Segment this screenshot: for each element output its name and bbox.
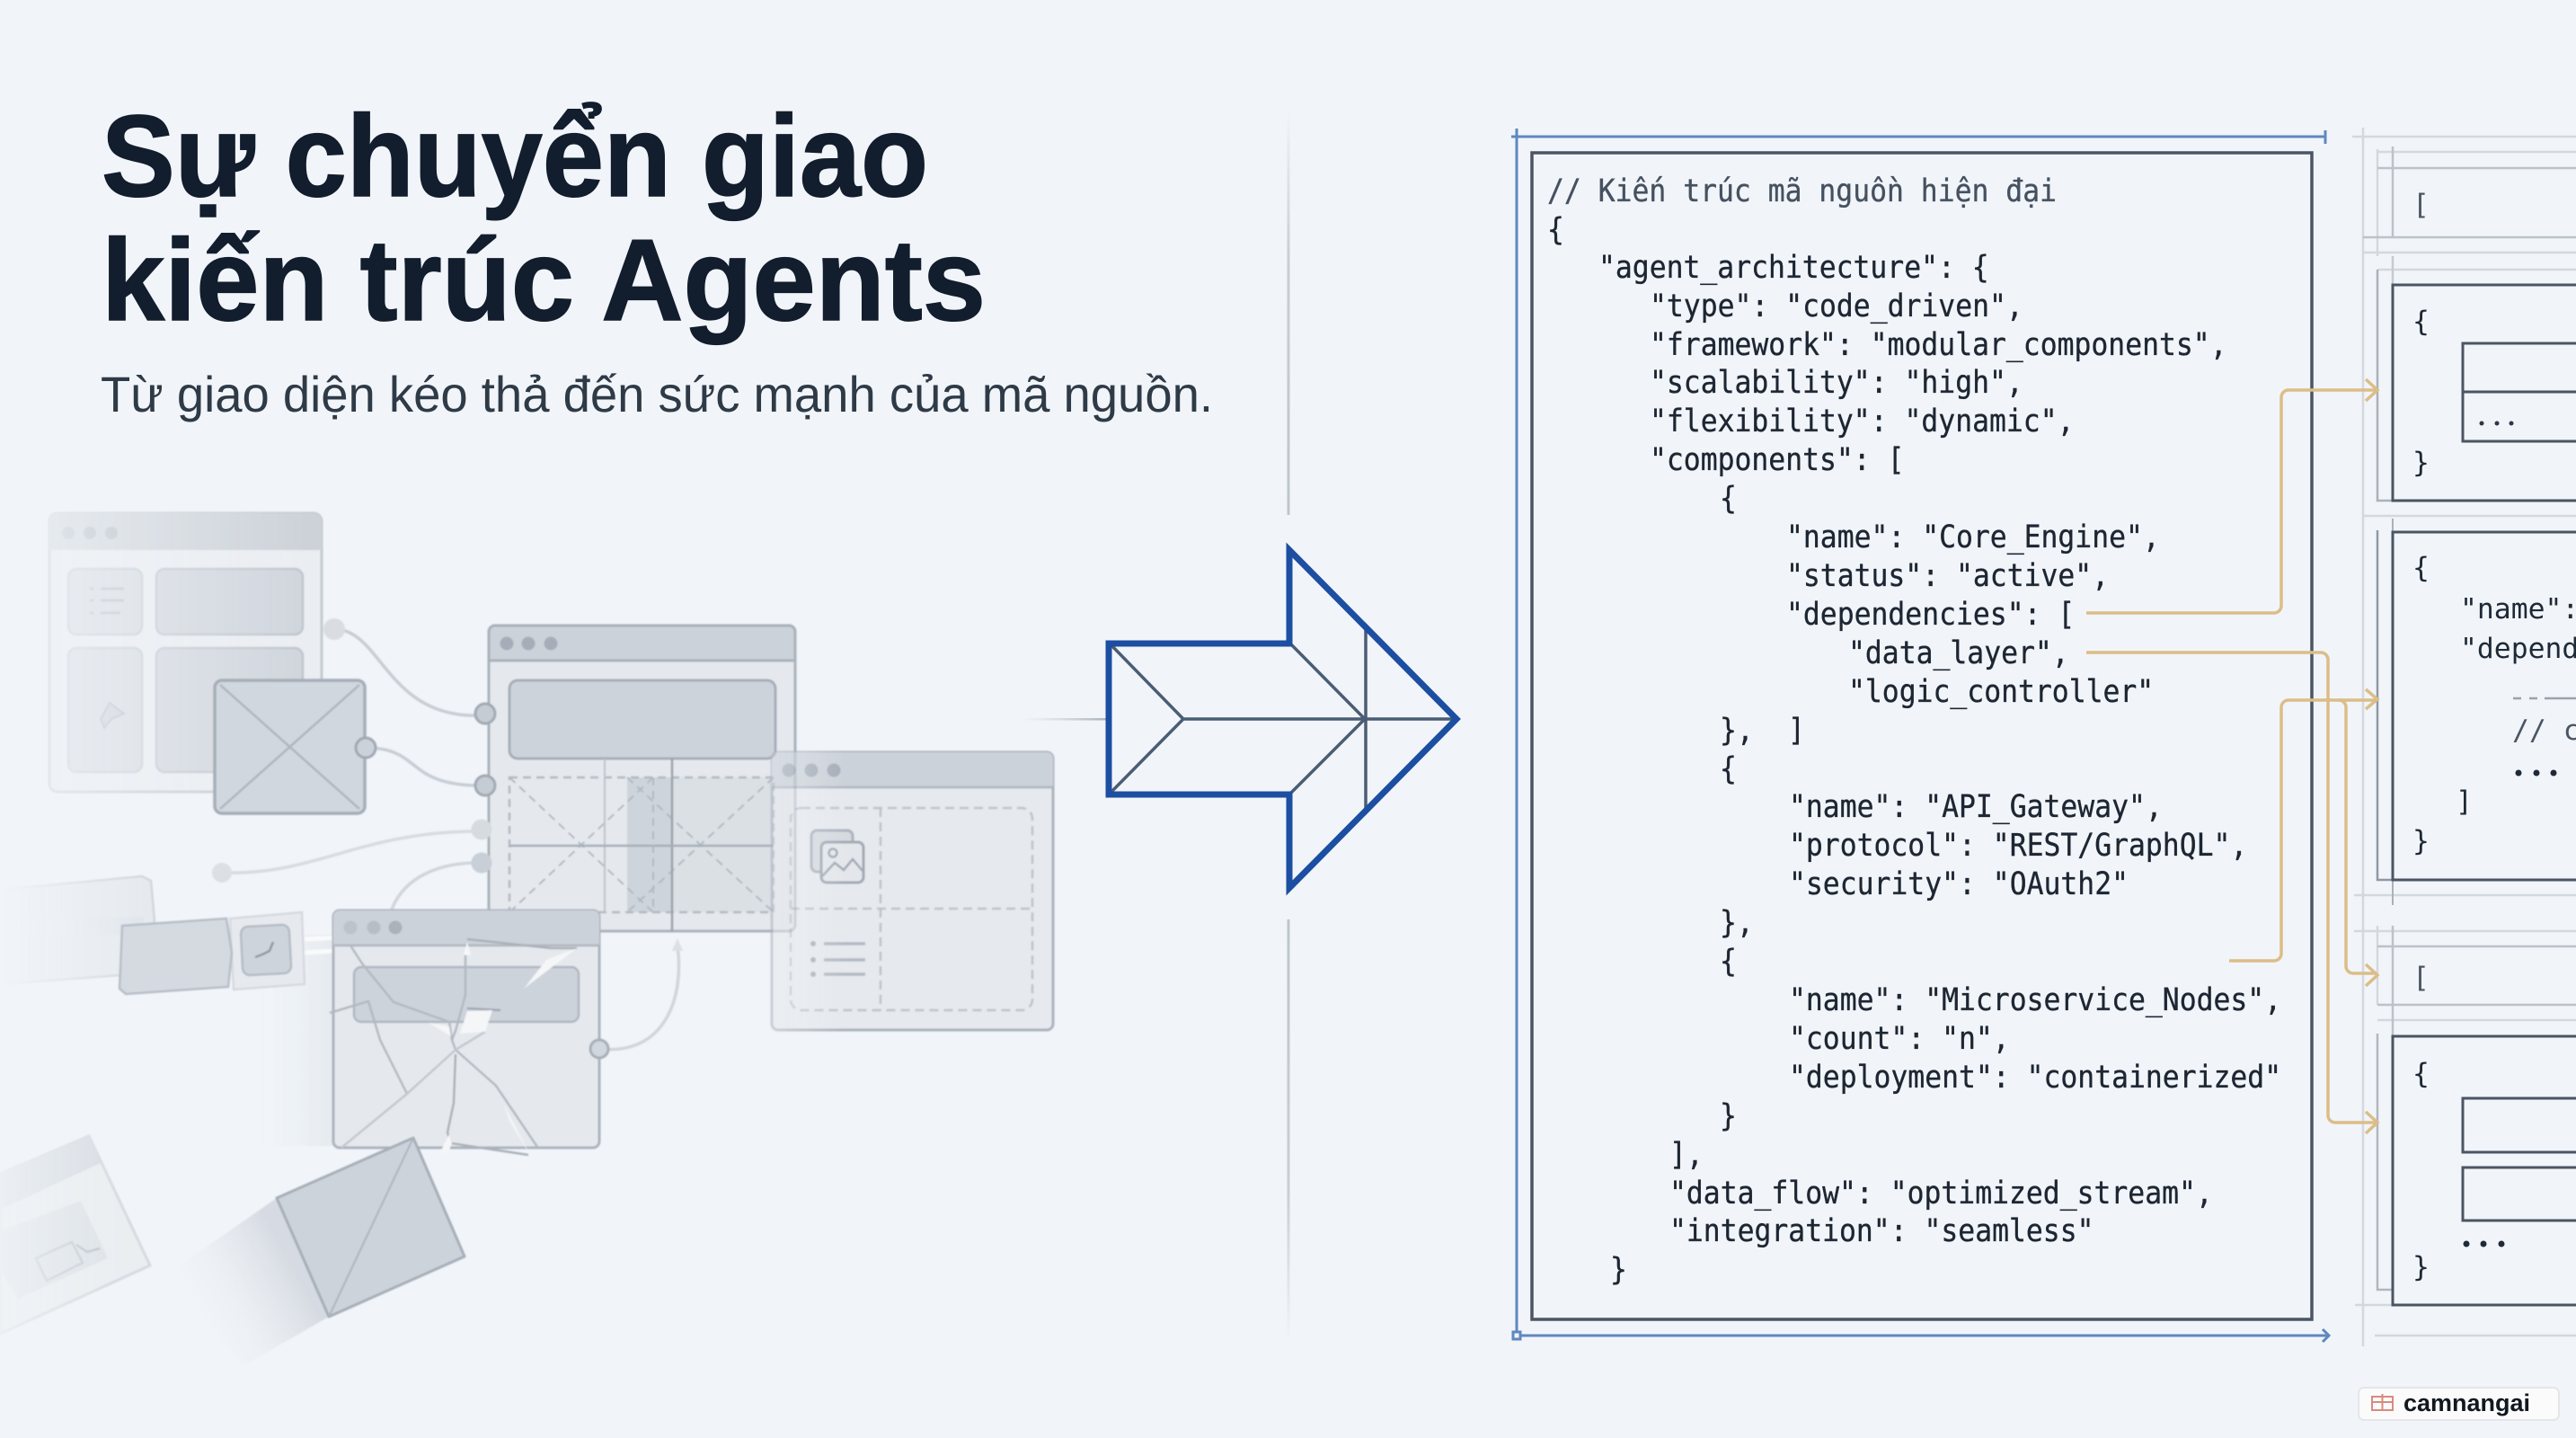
ghost panel: bracket top: [ bbox=[2412, 189, 2430, 221]
code text: "name": "Core_Engine", bbox=[1786, 519, 2160, 555]
code text: "name": "Microservice_Nodes", bbox=[1789, 982, 2281, 1018]
blue measurement frame bbox=[1511, 129, 2329, 1342]
code text: "count": "n", bbox=[1789, 1021, 2010, 1057]
code panel: object with two boxes: } bbox=[2412, 1251, 2430, 1283]
code text: "deployment": "containerized" bbox=[1789, 1060, 2281, 1096]
title bbox=[102, 92, 986, 345]
code text: ] bbox=[1788, 713, 1805, 749]
watermark text: camnangai bbox=[2403, 1389, 2530, 1416]
right ghost code panels bbox=[2352, 128, 2576, 1346]
connector from broken window bbox=[599, 938, 683, 1050]
code text: "components": [ bbox=[1650, 442, 1905, 478]
code panel: object with nested box: } bbox=[2412, 447, 2430, 479]
code text: "scalability": "high", bbox=[1650, 365, 2023, 401]
illustration: scattered drag-and-drop interface bbox=[0, 513, 1053, 1366]
code text: }, bbox=[1720, 713, 1754, 749]
central transition arrow bbox=[1109, 550, 1456, 888]
code text: "security": "OAuth2" bbox=[1789, 866, 2129, 902]
motion trail: rotated box bbox=[171, 1198, 329, 1366]
code text: "framework": "modular_components", bbox=[1650, 327, 2227, 363]
code text: { bbox=[1720, 944, 1737, 980]
code text: "logic_controller" bbox=[1848, 674, 2154, 710]
right browser window bbox=[772, 752, 1053, 1030]
broken browser window bbox=[330, 910, 608, 1155]
subtitle: Từ giao diện kéo thả đến sức mạnh của mã nguồn. bbox=[101, 366, 1213, 422]
code panel: object with nested box bbox=[2377, 256, 2576, 501]
rotated wireframe box bbox=[277, 1138, 465, 1317]
code panel: dependencies object: } bbox=[2412, 825, 2430, 857]
code panel: dependencies object: "depend bbox=[2460, 633, 2576, 665]
code text: { bbox=[1720, 751, 1737, 787]
code text bbox=[1547, 173, 2281, 1288]
ghost panel: bracket top bbox=[2363, 146, 2576, 237]
code text: "name": "API_Gateway", bbox=[1789, 789, 2163, 825]
main window nodes bbox=[473, 704, 495, 872]
code text: { bbox=[1547, 212, 1564, 248]
code text: "protocol": "REST/GraphQL", bbox=[1789, 828, 2247, 864]
motion trail: broken window bbox=[256, 935, 333, 1146]
ghost panel: bracket lower bbox=[2377, 926, 2576, 1036]
code text: } bbox=[1720, 1098, 1737, 1134]
code text: // Kiến trúc mã nguồn hiện đại bbox=[1547, 173, 2057, 209]
faded window top left bbox=[49, 513, 322, 792]
code text: "flexibility": "dynamic", bbox=[1650, 404, 2074, 439]
slanted card with icon bbox=[120, 912, 359, 994]
code panel: object with nested box: { bbox=[2412, 306, 2430, 338]
icon: book bbox=[2372, 1394, 2393, 1410]
code text: "dependencies": [ bbox=[1786, 597, 2075, 633]
code text: "integration": "seamless" bbox=[1669, 1213, 2094, 1249]
code text: "status": "active", bbox=[1786, 558, 2109, 594]
code panel: dependencies object: { bbox=[2412, 552, 2430, 584]
watermark badge bbox=[2359, 1388, 2559, 1420]
code panel: dependencies object: ] bbox=[2456, 786, 2473, 818]
slanted faded card bbox=[40, 875, 156, 981]
code panel: object with two boxes bbox=[2377, 1034, 2576, 1305]
wireframe image box bbox=[215, 680, 376, 813]
glass shards bbox=[429, 942, 577, 1155]
code panel: dependencies object bbox=[2377, 519, 2576, 905]
node: faded lower bbox=[212, 863, 232, 883]
main browser window bbox=[489, 626, 795, 931]
title: kiến trúc Agents bbox=[102, 216, 986, 345]
ghost rails and guide lines bbox=[2352, 128, 2576, 1346]
orange connector arrows bbox=[2086, 379, 2377, 1133]
code text: "type": "code_driven", bbox=[1650, 288, 2023, 324]
code text: "agent_architecture": { bbox=[1598, 250, 1989, 286]
code text: }, bbox=[1720, 905, 1754, 941]
code text: { bbox=[1720, 481, 1737, 517]
title: Sự chuyển giao bbox=[102, 92, 928, 221]
node: faded left bbox=[323, 618, 345, 640]
main code panel bbox=[1532, 153, 2312, 1319]
code text: "data_layer", bbox=[1848, 635, 2069, 671]
divider: top bbox=[1287, 112, 1290, 515]
rotated faded window bottom left bbox=[0, 1136, 150, 1334]
divider: bottom bbox=[1287, 919, 1290, 1342]
window cracks bbox=[330, 939, 577, 1155]
connector curves bbox=[221, 629, 481, 910]
code text: "data_flow": "optimized_stream", bbox=[1669, 1176, 2213, 1212]
ghost panel: bracket lower: [ bbox=[2412, 962, 2430, 994]
code panel: object with two boxes: { bbox=[2412, 1058, 2430, 1090]
code text: } bbox=[1610, 1252, 1627, 1288]
code text: ], bbox=[1669, 1137, 1704, 1173]
code panel: dependencies object: "name": bbox=[2460, 593, 2576, 626]
faint axis line bbox=[1022, 718, 1107, 721]
